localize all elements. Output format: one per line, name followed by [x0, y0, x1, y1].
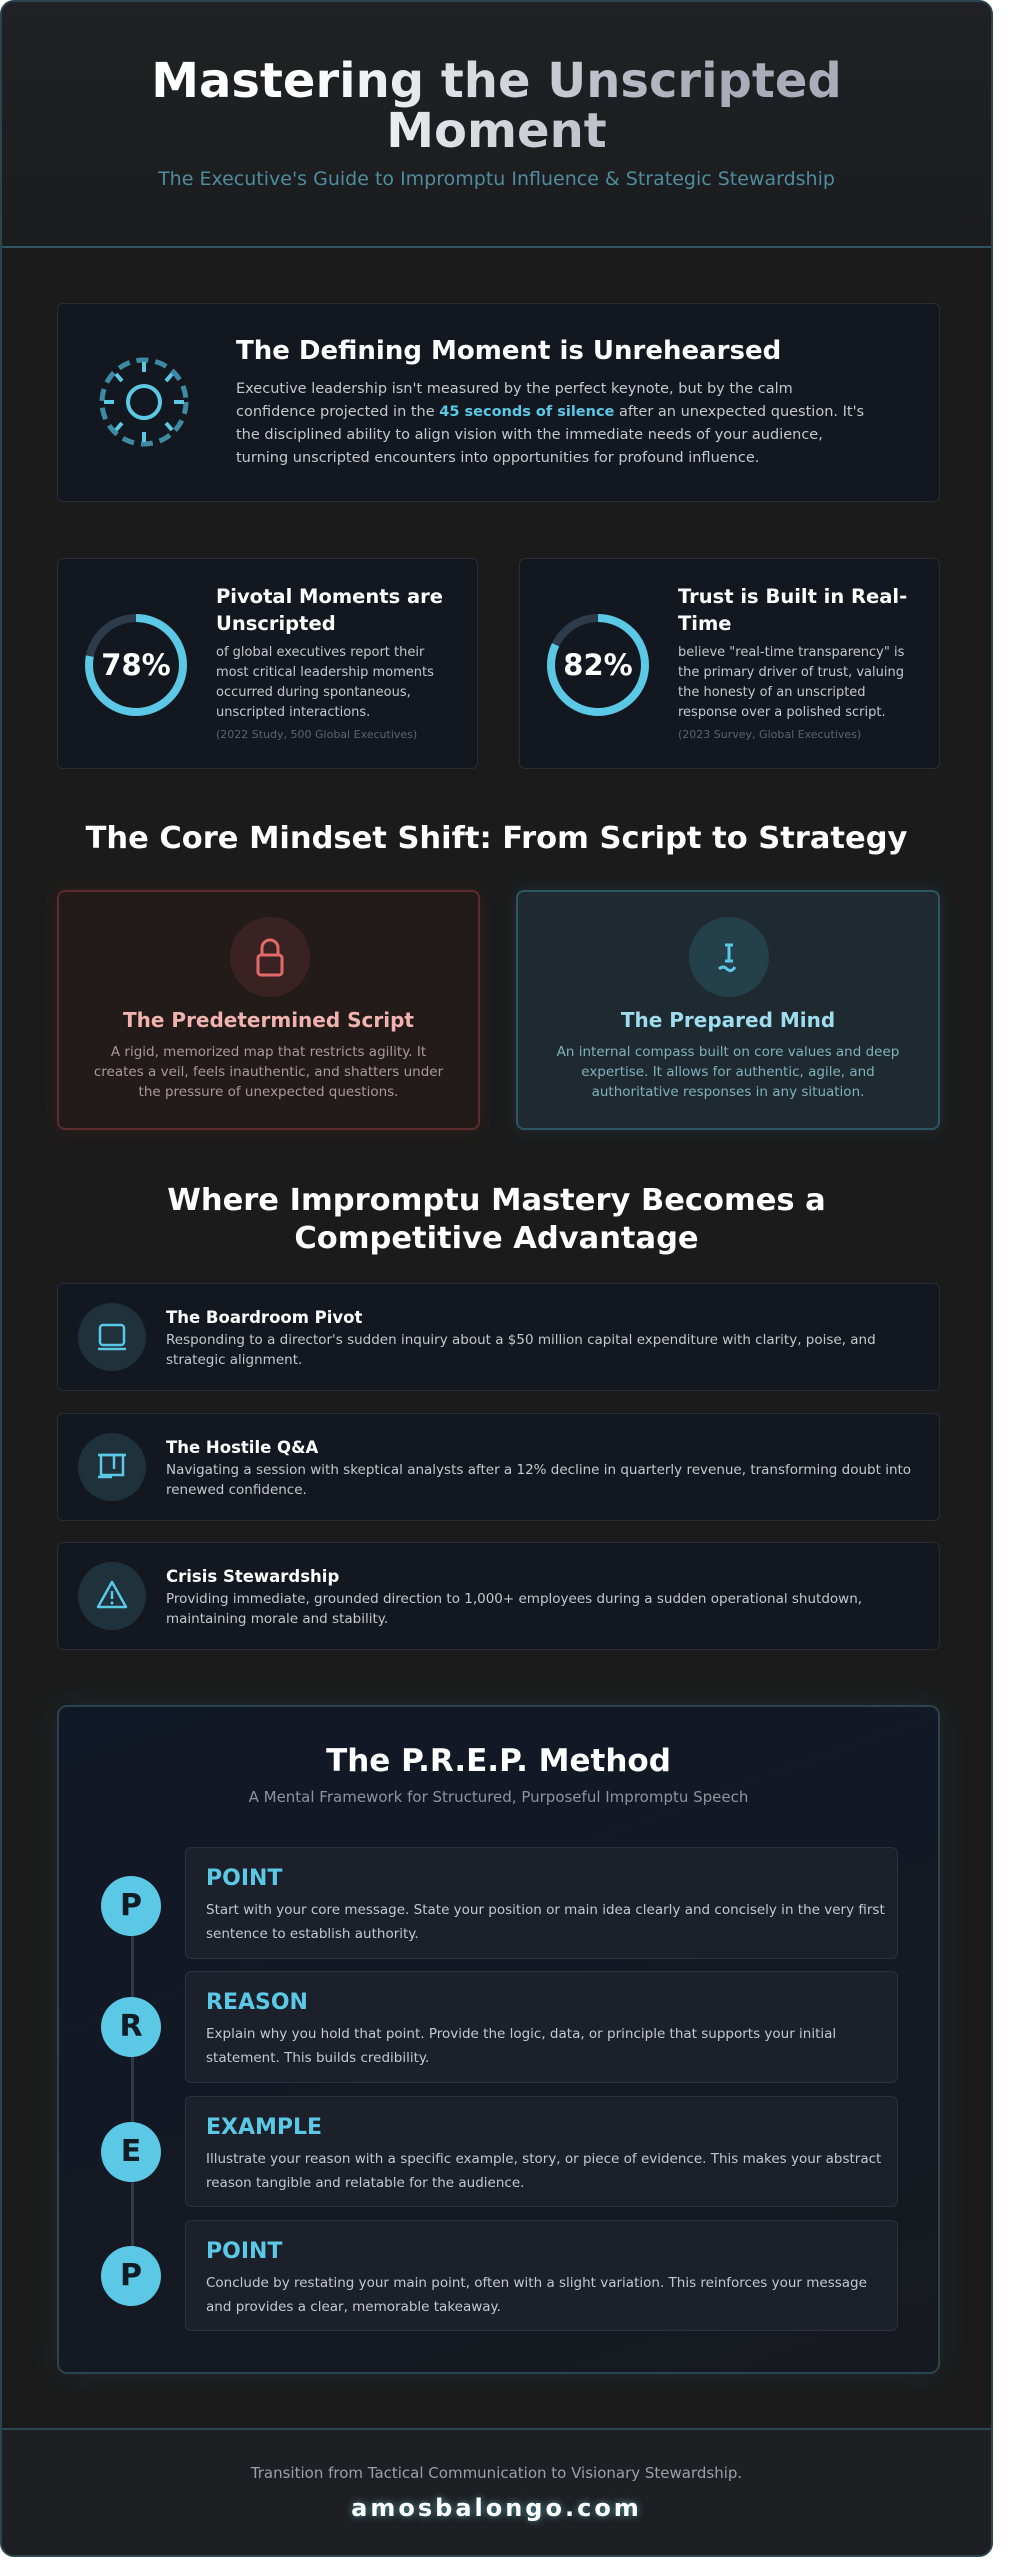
scenario: hostile Q&A	[57, 1413, 940, 1521]
step: point (conclude): Conclude by restating your main point, often with a slight variation. This reinforces your message and provides a clear, memorable takeaway.	[206, 2275, 867, 2315]
body text: Executive leadership isn't measured by the perfect keynote, but by the calm confidence projected in the 45 seconds of silence after an unexpected question. It's the disciplined ability to align vision with the immediate needs of your audience, turning unscripted encounters into opportunities for profound influence.	[236, 381, 864, 466]
body: Navigating a session with skeptical analysts after a 12% decline in quarterly revenue, transforming doubt into renewed confidence.	[166, 1462, 911, 1498]
icon: podium	[78, 1433, 146, 1501]
donut chart 78%	[85, 614, 187, 716]
icon: laptop	[78, 1303, 146, 1371]
step: reason	[101, 1971, 898, 2083]
title: Crisis Stewardship	[166, 1567, 339, 1586]
heading: competitive advantage: Competitive Advantage	[294, 1221, 699, 1256]
heading: The Defining Moment is Unrehearsed	[236, 336, 781, 366]
subtitle: The Executive's Guide to Impromptu Influence & Strategic Stewardship	[158, 168, 835, 190]
stat heading: Pivotal Moments are Unscripted	[216, 585, 443, 635]
title: Moment	[386, 103, 607, 159]
title: The Prepared Mind	[621, 1008, 835, 1032]
step: point: Start with your core message. State your position or main idea clearly and concisely in the very first sentence to establish authority.	[206, 1902, 885, 1942]
footer tagline: Transition from Tactical Communication to Visionary Stewardship.	[251, 2464, 742, 2482]
panel: defining moment	[57, 303, 940, 502]
title: The Hostile Q&A	[166, 1438, 318, 1457]
PREP subtitle: A Mental Framework for Structured, Purposeful Impromptu Speech	[249, 1788, 748, 1806]
step: example: EXAMPLE	[206, 2115, 322, 2140]
title: The Predetermined Script	[123, 1008, 414, 1032]
step: point (conclude): POINT	[206, 2239, 282, 2264]
icon: compass	[689, 917, 769, 997]
body: A rigid, memorized map that restricts agility. It creates a veil, feels inauthentic, and shatters under the pressure of unexpected questions.	[94, 1044, 443, 1100]
badge P: P	[120, 2258, 142, 2293]
scenario: crisis stewardship	[57, 1542, 940, 1650]
badge P	[101, 2246, 161, 2306]
donut chart 82%	[547, 614, 649, 716]
badge E: E	[121, 2134, 141, 2169]
stat body: of global executives report their most critical leadership moments occurred during spontaneous, unscripted interactions.	[216, 645, 434, 720]
donut chart 78%: 78%	[101, 648, 171, 682]
scenario: boardroom pivot	[57, 1283, 940, 1391]
stat body: (2022 Study, 500 Global Executives)	[216, 728, 417, 741]
step: example	[101, 2096, 898, 2207]
step: example: Illustrate your reason with a specific example, story, or piece of evidence. This makes your abstract reason tangible and relatable for the audience.	[206, 2151, 881, 2191]
panel: predetermined script	[57, 890, 480, 1130]
icon: warning	[78, 1562, 146, 1630]
badge E	[101, 2122, 161, 2182]
icon: gear	[100, 358, 188, 446]
heading: competitive advantage: Where Impromptu Mastery Becomes a	[167, 1183, 826, 1218]
step: point	[101, 1847, 898, 1959]
step: reason: Explain why you hold that point. Provide the logic, data, or principle that supports your initial statement. This builds credibility.	[206, 2026, 836, 2066]
body: An internal compass built on core values and deep expertise. It allows for authentic, agile, and authoritative responses in any situation.	[557, 1044, 899, 1100]
panel: PREP method	[57, 1705, 940, 2374]
badge P: P	[120, 1888, 142, 1923]
title: Mastering the Unscripted	[151, 53, 842, 109]
panel: stat 78%	[57, 558, 478, 769]
timeline line	[131, 1907, 134, 2277]
step: point: POINT	[206, 1866, 282, 1891]
donut chart 82%: 82%	[563, 648, 633, 682]
badge P	[101, 1876, 161, 1936]
body: Responding to a director's sudden inquiry about a $50 million capital expenditure with clarity, poise, and strategic alignment.	[166, 1332, 876, 1368]
badge R	[101, 1997, 161, 2057]
step: reason: REASON	[206, 1990, 308, 2015]
badge R: R	[119, 2009, 143, 2044]
heading: mindset shift: The Core Mindset Shift: From Script to Strategy	[86, 821, 907, 856]
header	[2, 2, 991, 248]
panel: stat 82%	[519, 558, 940, 769]
stat heading: Trust is Built in Real-Time	[678, 585, 907, 635]
icon: lock	[230, 917, 310, 997]
footer url: amosbalongo.com	[351, 2494, 642, 2522]
PREP title: The P.R.E.P. Method	[326, 1743, 671, 1779]
stat body: (2023 Survey, Global Executives)	[678, 728, 861, 741]
body: Providing immediate, grounded direction to 1,000+ employees during a sudden operational shutdown, maintaining morale and stability.	[166, 1591, 862, 1627]
panel: prepared mind	[516, 890, 940, 1130]
step: point (conclude)	[101, 2220, 898, 2331]
heading: competitive advantage	[167, 1183, 826, 1256]
footer	[2, 2428, 991, 2560]
title: The Boardroom Pivot	[166, 1308, 362, 1327]
title	[2, 56, 991, 156]
stat body: believe "real-time transparency" is the primary driver of trust, valuing the honesty of an unscripted response over a polished script.	[678, 645, 904, 720]
